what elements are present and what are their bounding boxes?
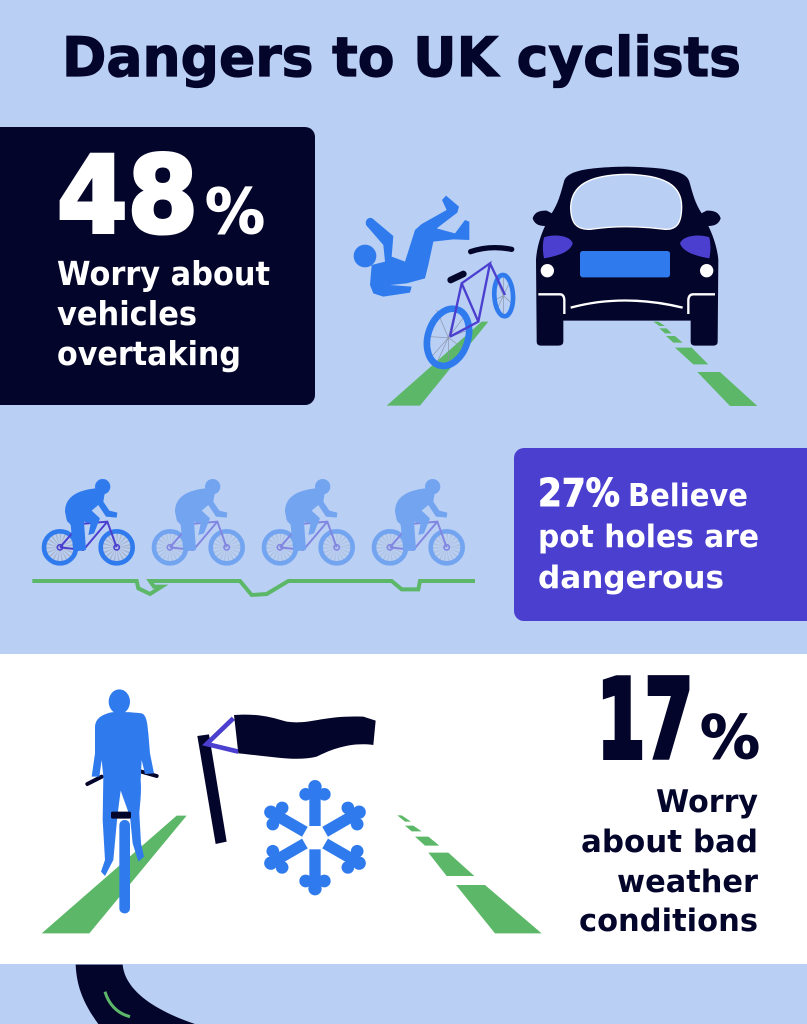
- illustration: cyclist thrown by car: [354, 167, 757, 406]
- text: worry about vehicles overtaking: Worry about: [57, 254, 270, 293]
- car: [533, 167, 721, 346]
- text: worry about bad weather conditions: Worry: [656, 784, 758, 820]
- cyclist 3: [264, 479, 353, 563]
- falling rider: [354, 196, 469, 297]
- road markings: [387, 322, 757, 406]
- illustration: rider in wind and snow: [42, 689, 542, 1024]
- road markings: [42, 815, 542, 933]
- flag in wind: [197, 715, 376, 844]
- text: worry about bad weather conditions: conditions: [579, 903, 758, 939]
- number plate: [580, 251, 670, 277]
- road curve: [76, 965, 195, 1024]
- car rear window: [571, 174, 682, 229]
- stat: 48%: 48: [57, 134, 198, 257]
- panel: 27% pot holes: [514, 448, 807, 621]
- cyclist 1: [44, 479, 133, 563]
- text: worry about bad weather conditions: weather: [617, 864, 759, 900]
- bicycle: [420, 248, 514, 371]
- title: Dangers to UK cyclists: [62, 26, 741, 89]
- icon: snowflake: [257, 780, 373, 895]
- text: worry about bad weather conditions: [579, 784, 759, 939]
- road with pot holes: [32, 581, 475, 595]
- panel: 17% bad weather: [0, 654, 807, 964]
- cyclist 4: [374, 479, 463, 563]
- text: 27% believe pot holes are dangerous: Believe: [628, 478, 748, 514]
- tail lights: [543, 236, 573, 258]
- cyclist 2: [154, 479, 243, 563]
- bumper lines: [538, 294, 715, 314]
- text: worry about vehicles overtaking: overtaking: [57, 334, 241, 373]
- text: 27% believe pot holes are dangerous: [538, 471, 759, 596]
- text: worry about bad weather conditions: about bad: [581, 824, 758, 860]
- text: 27% believe pot holes are dangerous: dangerous: [538, 560, 724, 596]
- stat: percent sign: %: [205, 175, 265, 248]
- text: 27% believe pot holes are dangerous: pot holes are: [538, 519, 759, 555]
- panel: 48% vehicles overtaking: [0, 127, 315, 405]
- text: worry about vehicles overtaking: vehicles: [57, 294, 197, 333]
- illustration: cyclists over pot holes: [32, 479, 475, 595]
- text: 27% believe pot holes are dangerous: 27%: [538, 471, 620, 515]
- stat: percent sign: %: [700, 703, 760, 773]
- text: worry about vehicles overtaking: [57, 254, 270, 373]
- reflectors: [541, 264, 554, 277]
- stat: 17%: 17: [597, 658, 693, 783]
- rider from front: [87, 689, 157, 913]
